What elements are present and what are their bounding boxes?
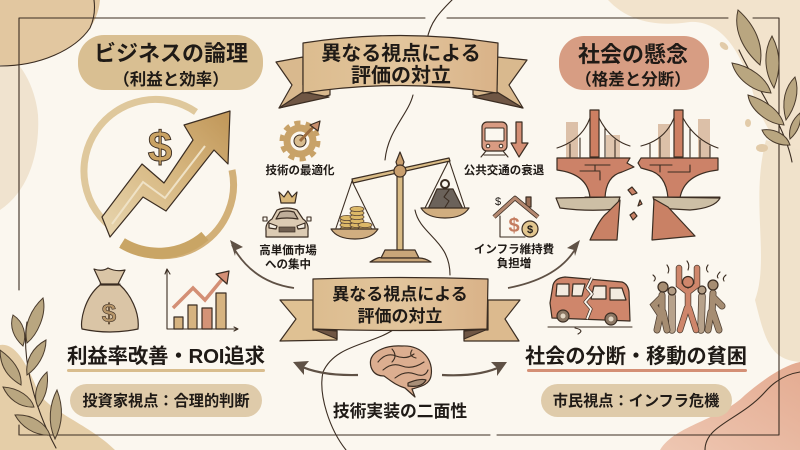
label: infrastructure upkeep burden line two: 負担増	[497, 256, 531, 270]
underline: right heading	[527, 369, 747, 372]
watercolor wash: bottom right	[660, 362, 800, 450]
heading: profit improvement and ROI: 利益率改善・ROI追求	[67, 345, 266, 368]
panel: social concern heading: （格差と分断）	[575, 70, 691, 89]
label: technology optimization: 技術の最適化	[266, 163, 335, 177]
arrow: to high-price market	[230, 240, 294, 288]
panel: business logic heading	[78, 35, 263, 90]
pill: citizen view: 市民視点：インフラ危機	[553, 392, 719, 410]
label: high-price market focus: 高単価市場	[259, 243, 317, 257]
icon: house with dollar and coin: $	[508, 215, 520, 237]
pill: citizen view	[541, 384, 732, 417]
arrow: to infrastructure burden	[508, 240, 580, 288]
panel: social concern heading	[559, 36, 709, 90]
label: duality of technology implementation: 技術実装の二面性	[333, 402, 467, 421]
banner: lower: 異なる視点による	[332, 285, 468, 304]
left pan with coins	[331, 206, 378, 239]
arrow: right from brain	[442, 362, 507, 376]
watercolor wash: top right	[608, 0, 800, 362]
underline: left heading	[67, 369, 265, 372]
banner: top: 評価の対立	[351, 64, 451, 87]
panel: business logic heading: ビジネスの論理	[94, 41, 248, 66]
pill: investor view	[70, 384, 262, 417]
bar chart: rising profit	[165, 269, 238, 331]
banner: lower	[280, 278, 520, 341]
icon: house with dollar and coin: $	[495, 196, 501, 208]
icon: brain	[370, 346, 431, 397]
icon: money bag: $	[102, 298, 117, 328]
icon: dollar ring with rising arrow	[84, 99, 234, 256]
label: infrastructure upkeep burden: インフラ維持費	[474, 242, 554, 256]
banner: top	[276, 36, 527, 108]
panel: social concern heading: 社会の懸念	[578, 42, 688, 67]
arrow: left from brain	[293, 361, 358, 375]
icon: gear with arrow	[282, 121, 320, 159]
right pan with cracked weight	[421, 180, 469, 218]
banner: top: 異なる視点による	[321, 42, 481, 65]
banner: lower: 評価の対立	[358, 307, 442, 326]
watercolor wash: top left	[0, 0, 100, 210]
leaf branch: top right	[718, 10, 800, 162]
panel: business logic heading: （利益と効率）	[113, 70, 229, 89]
central crack line	[322, 0, 452, 450]
icon: dollar ring with rising arrow: $	[148, 123, 172, 172]
balance scale: coins versus broken weight	[331, 152, 469, 262]
pill: investor view: 投資家視点：合理的判断	[82, 392, 250, 410]
label: public transport decline: 公共交通の衰退	[464, 163, 545, 177]
icon: money bag	[82, 268, 138, 332]
icon: house with dollar and coin: $	[527, 224, 533, 236]
label: high-price market focus line two: への集中	[265, 257, 311, 271]
icon: crown and luxury car	[263, 191, 311, 237]
icon: house with dollar and coin	[494, 196, 538, 237]
icon: train and down arrow	[481, 122, 528, 157]
heading: social division and mobility poverty: 社会の分断・移動の貧困	[525, 345, 747, 368]
icon: broken bus	[548, 277, 632, 334]
watercolor wash: bottom left	[0, 345, 115, 450]
leaf branch: bottom left	[0, 298, 61, 448]
icon: bridge broken in two	[556, 110, 720, 240]
icon: angry crowd	[653, 261, 726, 330]
